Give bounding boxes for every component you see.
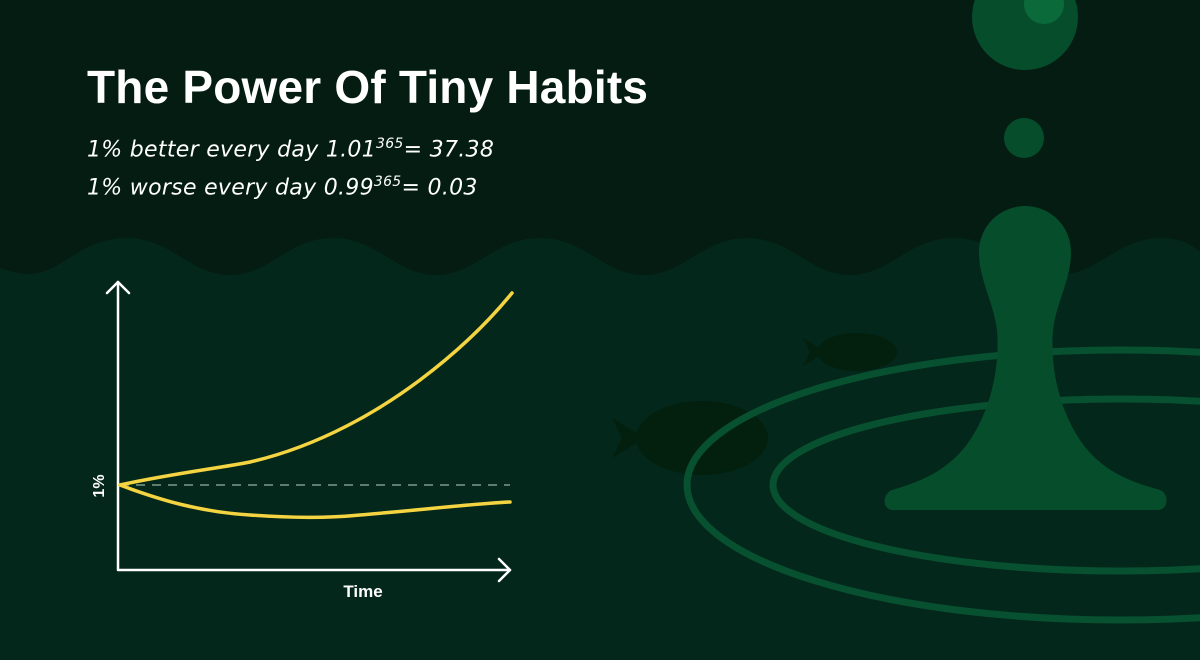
fish large xyxy=(612,401,768,475)
drop large xyxy=(972,0,1078,70)
water with wavy surface xyxy=(0,238,1200,660)
curve worse xyxy=(120,485,510,517)
y label: 1% xyxy=(91,474,108,498)
title: The Power Of Tiny Habits xyxy=(87,61,648,113)
x label: Time xyxy=(343,582,383,601)
drop small xyxy=(1004,118,1044,158)
axes xyxy=(107,282,510,581)
formula worse: 1% worse every day 0.99365= 0.03 xyxy=(87,174,478,200)
splash column xyxy=(885,206,1167,510)
fish small xyxy=(803,333,897,371)
baseline dashed xyxy=(120,484,510,486)
line chart xyxy=(91,280,514,601)
ripple outer xyxy=(687,350,1200,620)
formula better: 1% better every day 1.01365= 37.38 xyxy=(87,136,494,162)
curve better xyxy=(120,293,512,485)
ripple inner xyxy=(773,399,1200,571)
drop highlight xyxy=(1024,0,1064,24)
